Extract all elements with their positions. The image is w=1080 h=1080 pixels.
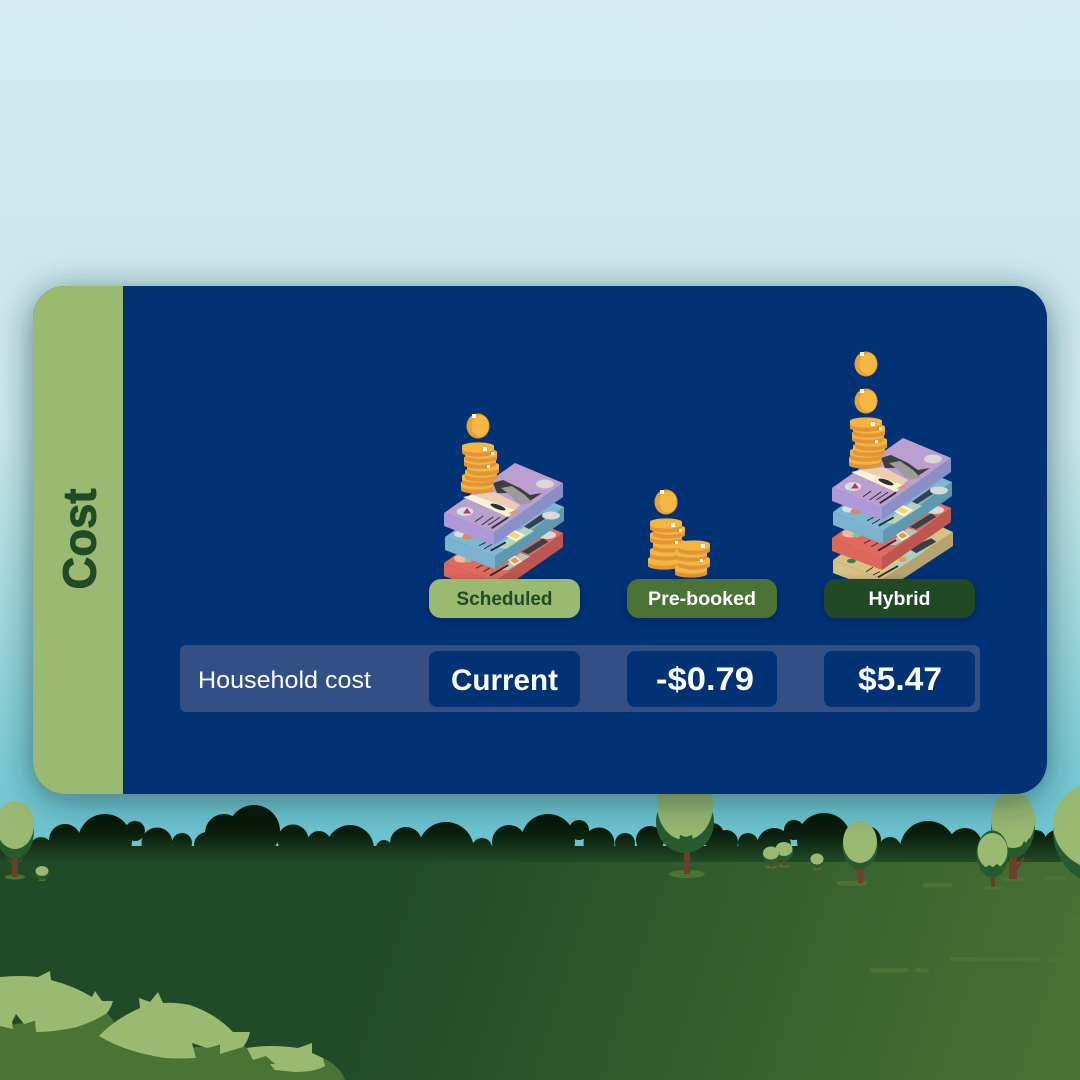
cost side band — [33, 286, 123, 794]
card panel — [33, 286, 1047, 794]
cell: $5.47: $5.47 — [858, 661, 942, 697]
bush highlight right — [247, 1043, 325, 1072]
household cost row — [180, 645, 980, 712]
label: Pre-booked: Pre-booked — [648, 589, 756, 610]
money icon: Scheduled — [444, 414, 564, 595]
row background — [180, 645, 980, 712]
cell: $5.47 — [824, 651, 975, 707]
bush highlight left — [0, 971, 113, 1032]
label: Hybrid — [824, 579, 975, 618]
tree: small solo — [810, 854, 824, 870]
tree: right front — [976, 830, 1008, 890]
distant treeline — [0, 805, 1080, 878]
label: Pre-booked — [627, 579, 777, 618]
label: Scheduled — [429, 579, 580, 618]
tree: right back — [991, 792, 1035, 882]
cell: -$0.79: -$0.79 — [656, 661, 754, 697]
cell: Current: Current — [451, 664, 558, 697]
card background — [33, 286, 1047, 794]
cell: -$0.79 — [627, 651, 777, 707]
cell: Current — [429, 651, 580, 707]
row label: Household cost — [198, 667, 371, 694]
foreground bushes — [0, 971, 345, 1080]
tree: far right crown — [1053, 777, 1080, 887]
ground — [0, 862, 1080, 1080]
money icon: Hybrid — [832, 352, 953, 592]
tree: mid right — [839, 821, 878, 886]
tree: centre large — [656, 770, 714, 878]
label: Hybrid: Hybrid — [868, 589, 930, 610]
money icon: Pre-booked — [648, 490, 710, 578]
tree: small left — [36, 866, 48, 881]
bush shadow mass — [0, 1013, 345, 1080]
bush highlight centre — [99, 992, 250, 1058]
label: Scheduled: Scheduled — [456, 589, 552, 610]
tree: far left — [0, 801, 34, 880]
heading: Cost: Cost — [54, 488, 106, 590]
grass marks — [837, 876, 1080, 972]
trees: small centre pair — [762, 842, 793, 868]
